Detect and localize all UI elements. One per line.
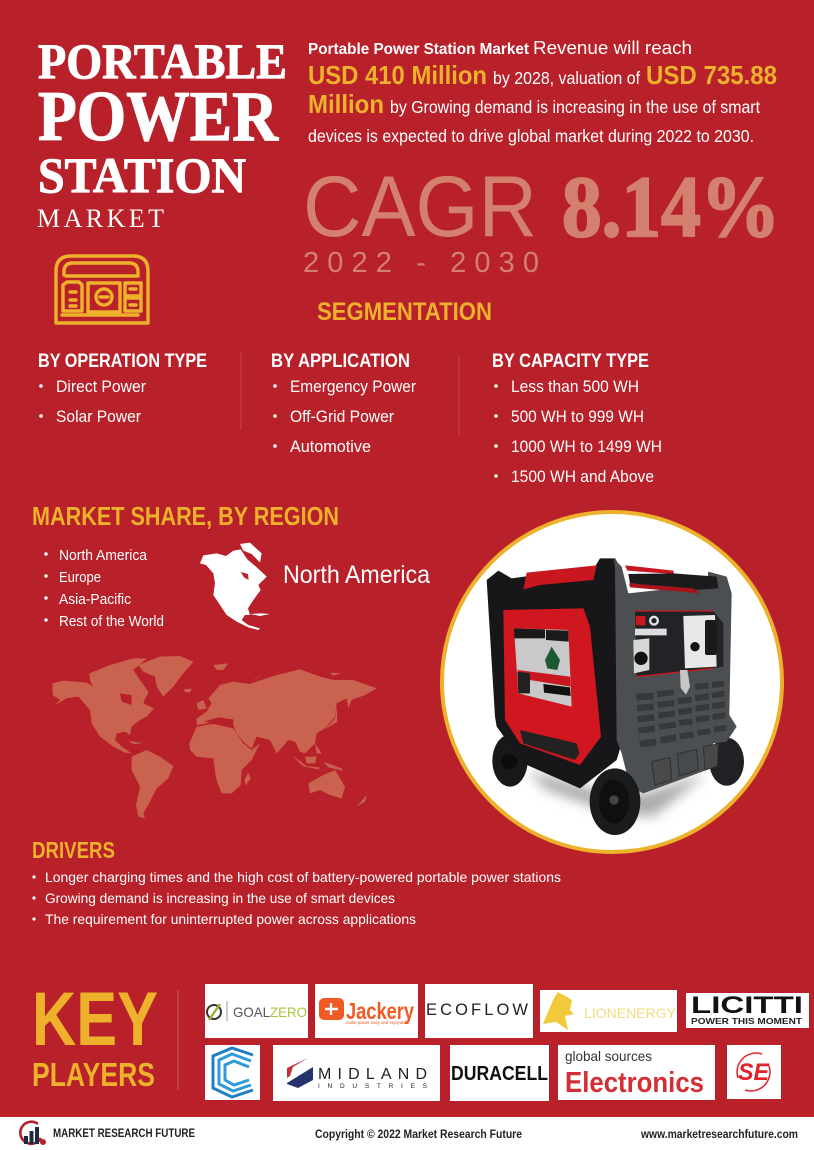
panel: by capacity type: 1500 WH and Above bbox=[511, 467, 654, 486]
region list: Asia-Pacific bbox=[59, 591, 131, 608]
logo: Jackery bbox=[315, 984, 418, 1038]
title: MARKET bbox=[37, 204, 164, 233]
logo: Midland Industries bbox=[273, 1045, 440, 1101]
logo: Licitti: LICITTI bbox=[691, 992, 803, 1019]
intro text block: Revenue will reach bbox=[533, 38, 692, 58]
logo: Licitti: POWER THIS MOMENT bbox=[691, 1016, 803, 1026]
intro text block: by Growing demand is increasing in the use of smart bbox=[390, 97, 760, 117]
title: POWER bbox=[38, 78, 279, 156]
logo: EcoFlow bbox=[425, 984, 533, 1038]
logo: Global Sources Electronics bbox=[558, 1045, 715, 1100]
panel: by operation type: Direct Power bbox=[56, 377, 146, 396]
panel: by capacity type bbox=[492, 351, 662, 486]
heading: key players: KEY bbox=[32, 977, 158, 1062]
logo: Jackery: Jackery bbox=[346, 998, 414, 1024]
logo: Global Sources Electronics: global sources bbox=[565, 1048, 652, 1064]
panel: by application: Emergency Power bbox=[290, 377, 416, 396]
heading: drivers: DRIVERS bbox=[32, 837, 115, 863]
logo: SE bbox=[727, 1045, 781, 1099]
footer bbox=[0, 1117, 814, 1150]
map: world bbox=[52, 656, 377, 818]
heading: segmentation: SEGMENTATION bbox=[317, 298, 492, 326]
footer: Copyright © 2022 Market Research Future bbox=[315, 1127, 522, 1141]
drivers list: Growing demand is increasing in the use of smart devices bbox=[45, 890, 395, 906]
intro text block: Million bbox=[308, 89, 384, 119]
label: North America: North America bbox=[283, 561, 430, 589]
panel: by capacity type: BY CAPACITY TYPE bbox=[492, 351, 649, 372]
intro text block: USD 735.88 bbox=[646, 60, 777, 90]
logo: SE: SE bbox=[738, 1059, 770, 1086]
logo: Midland Industries: MIDLAND bbox=[318, 1066, 427, 1083]
product photo: generator in circle bbox=[442, 512, 782, 852]
logo: Duracell bbox=[450, 1045, 549, 1101]
CAGR callout bbox=[303, 158, 780, 279]
drivers list: Longer charging times and the high cost of battery-powered portable power stations bbox=[45, 869, 561, 885]
map: North America bbox=[200, 543, 270, 630]
intro text block: Portable Power Station Market bbox=[308, 41, 530, 58]
region list bbox=[44, 547, 164, 630]
heading: market share: MARKET SHARE, BY REGION bbox=[32, 501, 339, 531]
region list: North America bbox=[59, 547, 148, 564]
panel: by application: Off-Grid Power bbox=[290, 407, 394, 426]
logo: Licitti bbox=[686, 992, 809, 1028]
panel: by operation type bbox=[38, 351, 207, 426]
panel: by capacity type: 500 WH to 999 WH bbox=[511, 407, 644, 426]
region list: Europe bbox=[59, 569, 101, 586]
panel: by capacity type: Less than 500 WH bbox=[511, 377, 639, 396]
panel: by application: Automotive bbox=[290, 437, 371, 456]
intro text block: devices is expected to drive global market during 2022 to 2030. bbox=[308, 126, 754, 146]
logo: Global Sources Electronics: Electronics bbox=[565, 1067, 704, 1099]
CAGR callout: CAGR bbox=[303, 159, 537, 255]
drivers list: The requirement for uninterrupted power across applications bbox=[45, 911, 416, 927]
intro text block: by 2028, valuation of bbox=[493, 68, 640, 88]
intro text block bbox=[308, 38, 777, 146]
logo: Goal Zero: ZERO bbox=[270, 1004, 307, 1020]
panel: by operation type: Solar Power bbox=[56, 407, 141, 426]
heading: key players bbox=[32, 977, 158, 1093]
logo: Goal Zero bbox=[205, 984, 308, 1038]
CAGR callout: 2022 - 2030 bbox=[303, 247, 539, 279]
logo: EcoFlow: ECOFLOW bbox=[426, 1001, 528, 1019]
logo: Lion Energy: LIONENERGY bbox=[584, 1005, 677, 1021]
CAGR callout: 8.14% bbox=[562, 158, 780, 255]
panel: by application: BY APPLICATION bbox=[271, 351, 410, 372]
logo: Midland Industries: INDUSTRIES bbox=[318, 1083, 428, 1090]
logo: blue C bbox=[205, 1045, 260, 1100]
footer: MARKET RESEARCH FUTURE bbox=[53, 1126, 195, 1140]
title: STATION bbox=[38, 147, 246, 203]
logo: Goal Zero: GOAL bbox=[233, 1004, 270, 1020]
icon: portable power station bbox=[56, 256, 148, 323]
logo: Lion Energy bbox=[540, 990, 677, 1032]
region list: Rest of the World bbox=[59, 613, 164, 630]
logo: Jackery: make power easy and enjoyable bbox=[346, 1020, 408, 1025]
heading: key players: PLAYERS bbox=[32, 1056, 155, 1093]
footer logo icon bbox=[20, 1122, 46, 1145]
title: PORTABLE bbox=[38, 33, 287, 89]
intro text block: USD 410 Million bbox=[308, 60, 487, 90]
panel: by application bbox=[271, 351, 416, 456]
panel: by capacity type: 1000 WH to 1499 WH bbox=[511, 437, 662, 456]
logo: Duracell: DURACELL bbox=[451, 1063, 548, 1085]
drivers list bbox=[32, 869, 561, 927]
title bbox=[37, 33, 287, 233]
panel: by operation type: BY OPERATION TYPE bbox=[38, 351, 207, 372]
